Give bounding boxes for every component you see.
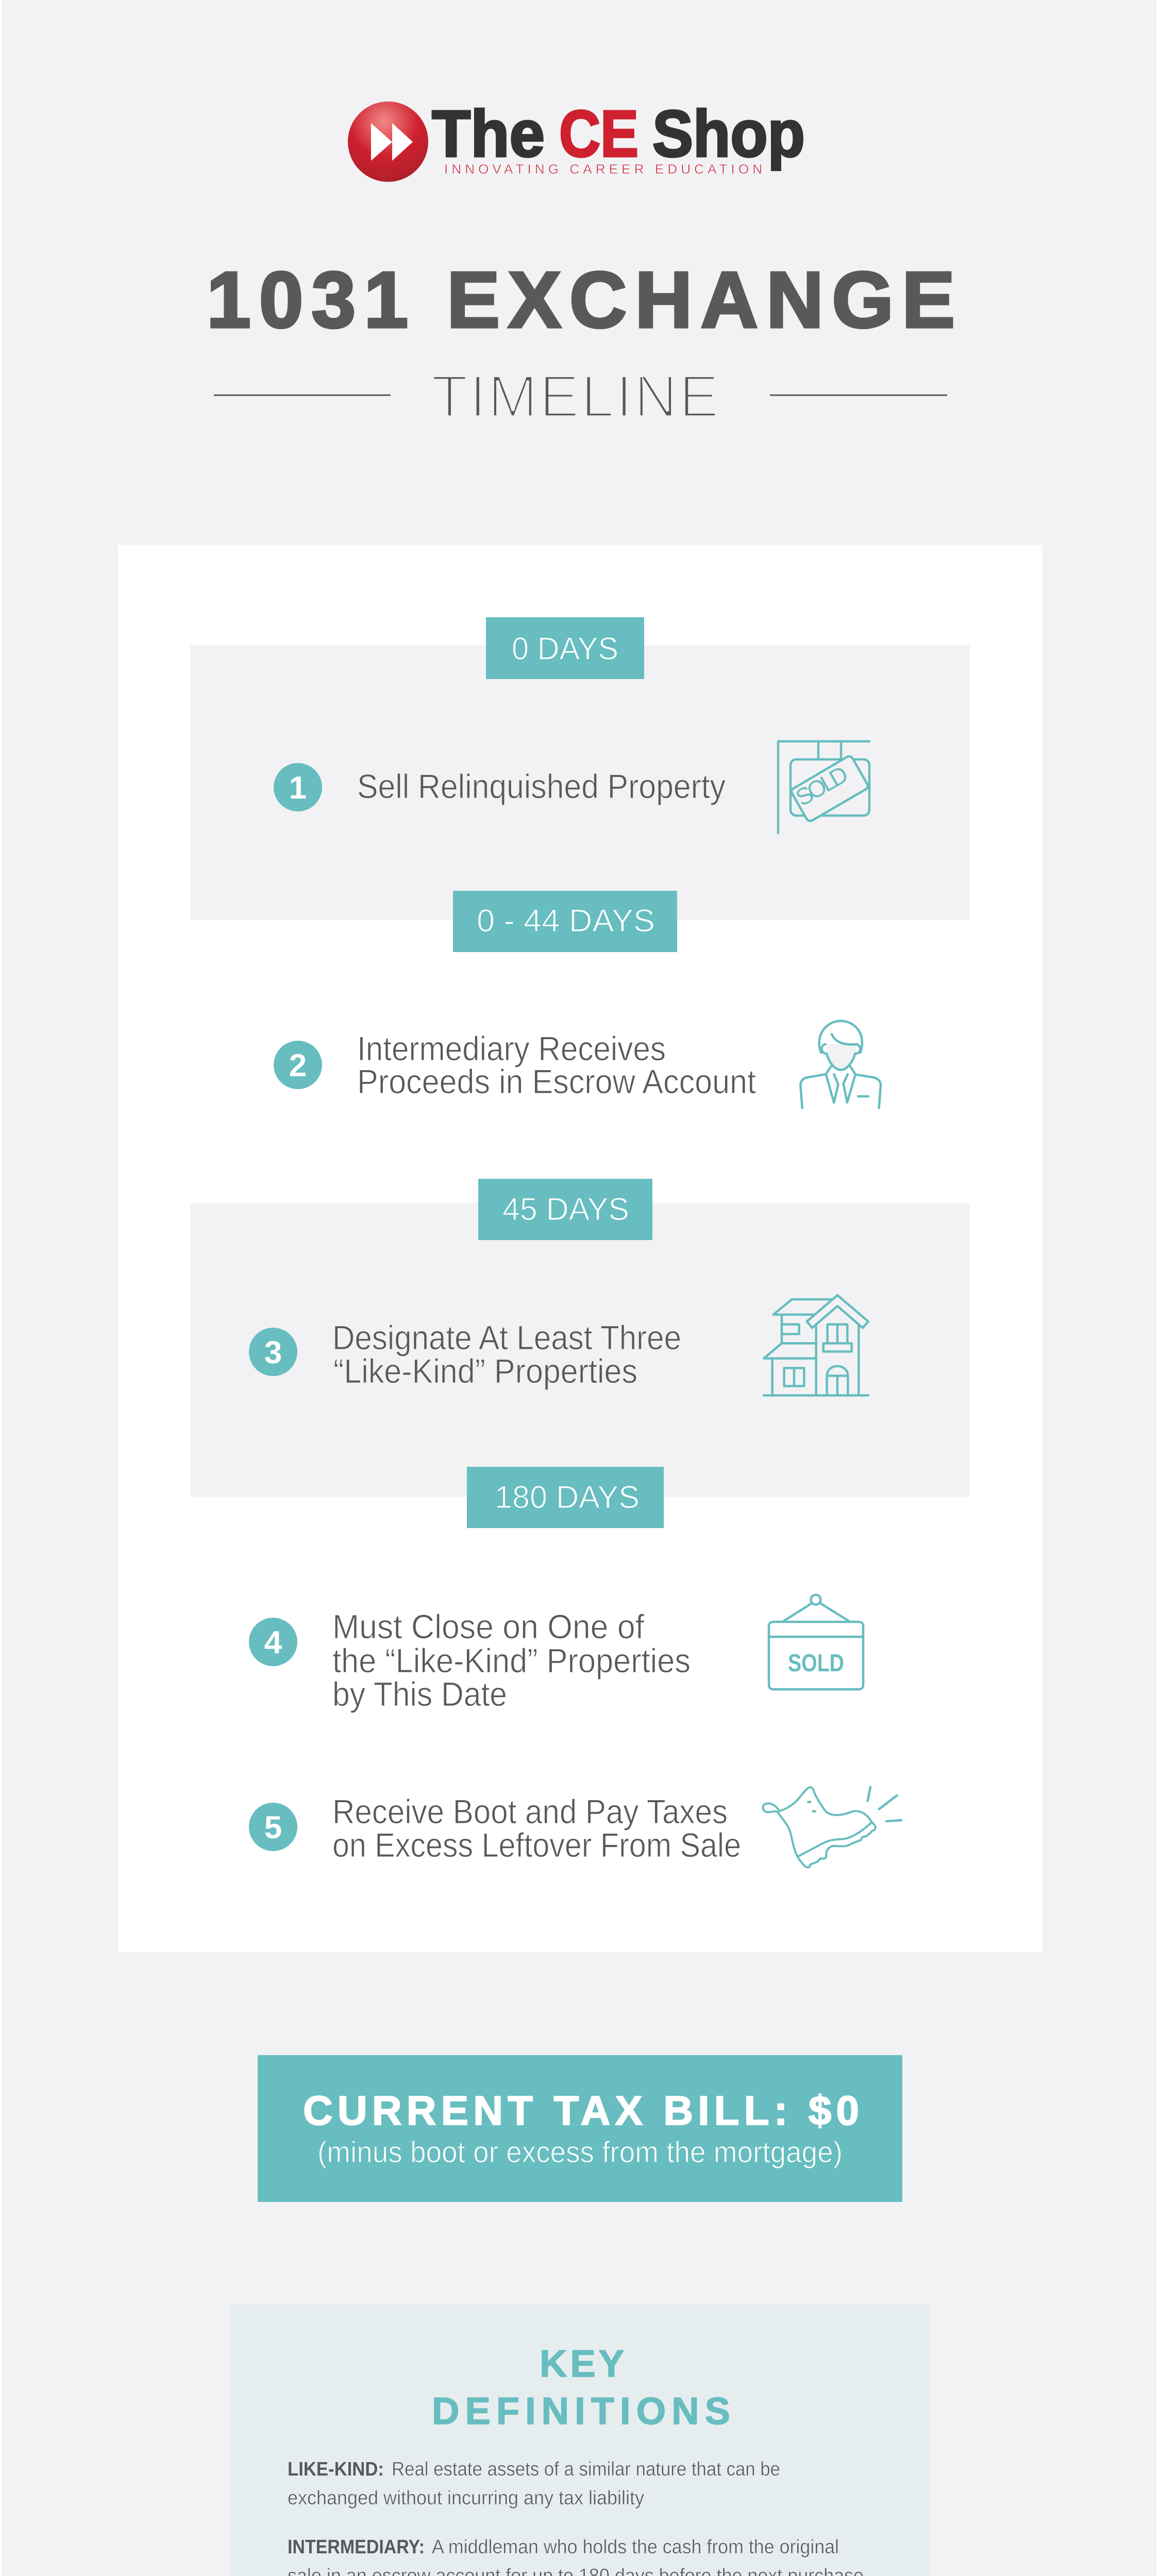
icon: house [764,1295,868,1395]
step 1 [274,763,726,811]
step 3: Designate At Least Three [332,1318,681,1357]
step 3: 3 [264,1335,282,1370]
panel: key definitions [229,2304,931,2576]
icon: intermediary person [800,1021,881,1108]
step 4: the “Like-Kind” Properties [332,1641,691,1680]
step 4 [249,1607,691,1713]
icon: hanging sold sign: SOLD [791,760,853,811]
step 2 [274,1029,756,1100]
logo: The CE Shop: The [432,97,545,171]
subtitle with rules: TIMELINE [431,363,719,430]
tag: 0 days [486,617,644,679]
definition: like-kind: LIKE-KIND: [288,2459,384,2480]
tag: 180 days [467,1467,664,1528]
tag: 0 - 44 days: 0 - 44 DAYS [477,903,655,939]
heading: key definitions [432,2342,730,2432]
tag: 0 days: 0 DAYS [512,631,618,667]
step 3 [249,1318,681,1390]
logo: The CE Shop: INNOVATING CAREER EDUCATION [444,161,762,177]
tag: 45 days [478,1179,652,1240]
step 2: 2 [289,1048,307,1083]
icon: hanging sold placard: SOLD [788,1650,844,1677]
step 3: “Like-Kind” Properties [333,1352,637,1390]
panel: step 1 background [190,646,970,920]
step 2: Intermediary Receives [357,1029,666,1067]
step 4: Must Close on One of [332,1607,645,1646]
step 4: by This Date [332,1675,507,1713]
step 5: on Excess Leftover From Sale [332,1826,741,1864]
definition: intermediary: INTERMEDIARY: [288,2536,425,2558]
icon: hanging sold placard [769,1595,863,1689]
step 5: 5 [264,1810,282,1845]
step 4: 4 [264,1625,282,1660]
definition: like-kind: exchanged without incurring any tax liability [288,2487,644,2509]
panel: timeline card [118,545,1043,1952]
heading: key definitions: DEFINITIONS [432,2389,730,2432]
step 5: Receive Boot and Pay Taxes [332,1792,728,1831]
logo: The CE Shop: Shop [652,97,805,171]
icon: red play button [348,101,428,182]
step 1: 1 [289,770,307,806]
tag: 180 days: 180 DAYS [495,1480,640,1515]
icon: boot kicking [763,1787,901,1867]
step 2: Proceeds in Escrow Account [357,1062,756,1100]
definition: intermediary [288,2536,864,2576]
logo: The CE Shop: CE [559,97,638,171]
definition: intermediary: A middleman who holds the cash from the original [432,2536,839,2558]
callout: current tax bill: CURRENT TAX BILL: $0 [303,2088,859,2133]
tag: 45 days: 45 DAYS [502,1192,629,1227]
heading: key definitions: KEY [540,2342,624,2385]
icon: hanging sold sign [778,741,869,833]
step 1: Sell Relinquished Property [357,767,726,805]
title: 1031 EXCHANGE [207,256,955,344]
definition: like-kind [288,2459,780,2509]
logo: The CE Shop [348,97,805,182]
definition: like-kind: Real estate assets of a similar nature that can be [392,2459,780,2480]
panel: step 3 background [190,1203,970,1497]
callout: current tax bill: (minus boot or excess from the mortgage) [317,2136,843,2169]
step 5 [249,1792,741,1864]
callout: current tax bill [258,2055,902,2202]
tag: 0 - 44 days [453,891,677,952]
